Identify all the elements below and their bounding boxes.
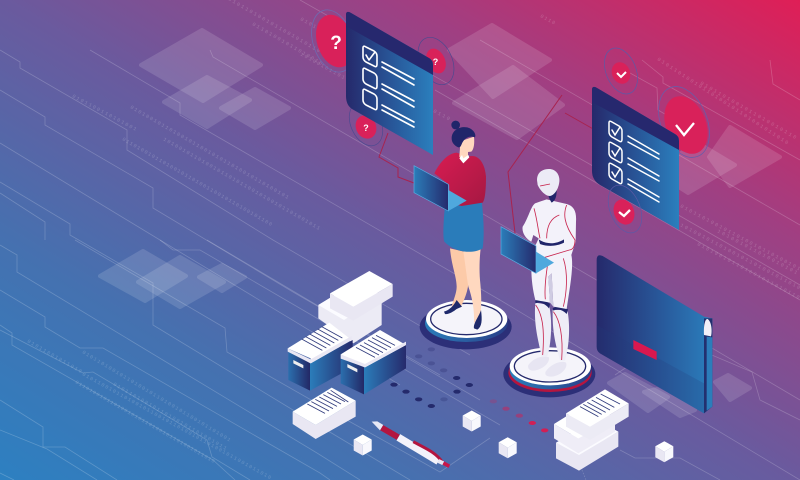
legs (535, 303, 569, 361)
binary code streams: 10100101101 (299, 52, 346, 81)
collar (459, 155, 469, 163)
laptop (414, 166, 467, 211)
neck (548, 190, 557, 203)
bubble: small question mark right: ? (433, 57, 438, 67)
document boxes and paper stacks (288, 271, 449, 466)
binary code streams: 0101101001011010010110 (699, 81, 797, 141)
binary code streams: 01011010010 (299, 17, 346, 46)
bubble: small check top (598, 43, 644, 99)
checkbox list (363, 46, 414, 127)
cube (499, 437, 517, 458)
bubble: small question mark bottom (343, 97, 389, 151)
panel: right checklist (592, 87, 679, 230)
knee joints (535, 300, 568, 314)
bubble: small question mark bottom: ? (363, 123, 369, 133)
binary code streams: 101001011010010101 (716, 228, 798, 276)
binary code streams: 01011001011010010110010110100101101001011001011010 (81, 372, 272, 480)
connector lines (379, 95, 595, 233)
lower paper stack (318, 282, 382, 343)
legs (450, 248, 481, 323)
robot with laptop (501, 169, 576, 377)
platform: woman (420, 300, 512, 349)
binary code streams: 0110 (432, 108, 451, 122)
translucent isometric tiles (100, 25, 780, 416)
right paper stacks (554, 389, 629, 471)
cube (655, 441, 673, 462)
binary code streams: 01011010010110100101101001011 (112, 382, 228, 452)
hair (451, 121, 475, 147)
left question bubbles (304, 4, 461, 151)
shading (548, 273, 553, 307)
laptop (501, 227, 554, 273)
torso and thighs (522, 199, 576, 309)
binary code streams: 0101101001011010010110100101 (679, 203, 800, 272)
binary code streams: 01011010010110100101101001011010 (656, 57, 789, 146)
neck and face (459, 137, 474, 162)
middle stack (554, 402, 615, 453)
bubble: large check (649, 79, 719, 165)
top paper stack (330, 271, 393, 321)
bubble: large question mark: ? (330, 33, 342, 54)
circuit accent lines (534, 184, 575, 360)
binary code streams: 10100101101001011010110010100101101001011 (162, 137, 321, 232)
small cubes (354, 410, 673, 462)
binary code streams: 0110 (539, 13, 556, 26)
binary code streams: 0101100110101001 (71, 93, 137, 133)
shoes (444, 300, 482, 330)
folder (597, 255, 712, 413)
bubble: small question mark right (411, 32, 461, 90)
floor dots (390, 347, 548, 432)
binary code streams: 01101001011010010 (251, 22, 323, 67)
woman with laptop (414, 121, 486, 330)
checkbox list with ticks (609, 121, 659, 202)
box right (341, 330, 406, 394)
feet (528, 357, 566, 377)
pen (372, 421, 449, 466)
box left (288, 323, 353, 391)
platform: robot (503, 347, 595, 397)
sweater (434, 153, 486, 206)
paper stack front (293, 388, 356, 439)
cube (463, 410, 481, 432)
head (537, 169, 559, 196)
binary code streams: 01011001011010 (26, 339, 83, 375)
panel: left checklist (346, 12, 433, 155)
binary code streams: 0110100101101001010110100101101001011010 (74, 380, 216, 465)
binary code streams: 0101101001011010010110100101100101101001 (81, 350, 231, 443)
top stack (566, 389, 629, 440)
binary code streams: 01101001011010010110100110010110100101100 (121, 137, 273, 228)
skirt (443, 200, 484, 252)
binary code streams: 1010010110100101101001011010 (679, 222, 800, 291)
binary code streams: 01010010110100101100101011010010110100101 (129, 105, 290, 201)
cube (354, 434, 372, 456)
right check bubbles behind panel (598, 43, 719, 165)
bottom stack (556, 420, 618, 471)
belt (539, 239, 564, 246)
red tag (633, 340, 657, 360)
bubble: large question mark (304, 4, 362, 78)
bubble: small check bottom (602, 180, 648, 238)
